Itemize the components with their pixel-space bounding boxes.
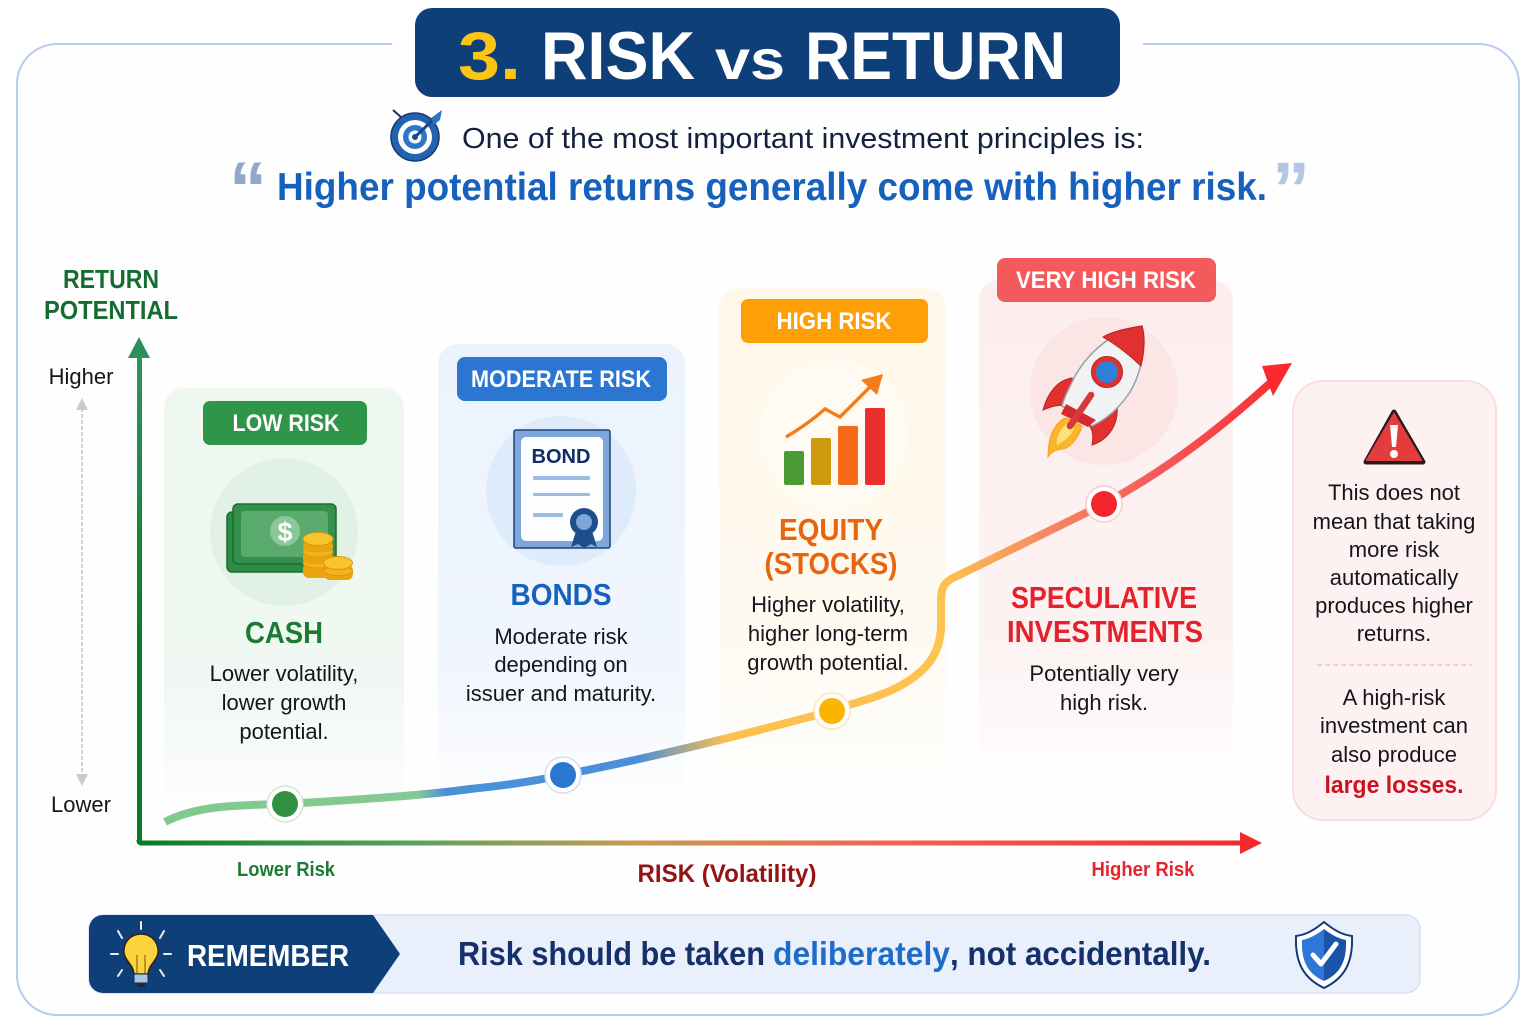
return potential axis title: POTENTIAL [44, 295, 178, 325]
dashed scale arrow [76, 398, 88, 786]
text: loss warning: large losses. [1324, 772, 1464, 799]
marker: bonds [545, 757, 581, 793]
text: equity description: Higher volatility, [751, 592, 905, 617]
title banner: RETURN [805, 18, 1066, 94]
panel: bonds [438, 344, 685, 809]
text: equity description: higher long-term [748, 621, 908, 646]
text: speculative description: Potentially very [1029, 661, 1179, 686]
icon: light bulb [111, 922, 171, 987]
heading: bonds: BONDS [510, 577, 612, 612]
icon: target [391, 110, 442, 161]
heading: equity stocks: (STOCKS) [764, 546, 898, 581]
badge: low risk: LOW RISK [232, 410, 340, 437]
text: bonds description: depending on [494, 652, 628, 677]
badge: high risk: HIGH RISK [776, 308, 892, 335]
label: lower risk: Lower Risk [237, 859, 336, 881]
badge: high risk [741, 299, 928, 343]
text: warning explanation: returns. [1357, 621, 1431, 646]
right quote mark: ” [1272, 147, 1310, 232]
badge: moderate risk: MODERATE RISK [471, 366, 652, 393]
icon: cash and coins [210, 458, 358, 606]
text: cash description: lower growth [222, 690, 346, 715]
y axis arrow [128, 337, 150, 843]
text: warning explanation: produces higher [1315, 593, 1473, 618]
heading: speculative investments: SPECULATIVE [1011, 580, 1197, 615]
label: higher: Higher [49, 364, 113, 389]
icon: warning triangle [1366, 412, 1423, 462]
icon: shield check [1296, 922, 1352, 988]
panel: speculative investments [979, 258, 1233, 790]
heading: equity stocks: EQUITY [779, 512, 883, 547]
icon: rocket [1030, 317, 1178, 465]
text: remember message: Risk should be taken [458, 935, 765, 972]
x axis title: RISK (Volatility) [638, 860, 816, 888]
panel: warning note [1293, 381, 1496, 820]
badge: very high risk [997, 258, 1216, 302]
heading: cash: CASH [245, 615, 323, 650]
left quote mark: “ [229, 147, 267, 232]
text: cash description: potential. [239, 719, 329, 744]
title banner: vs [715, 28, 785, 91]
text: warning explanation: automatically [1330, 565, 1458, 590]
icon: bond certificate [486, 416, 636, 566]
key principle quote: Higher potential returns generally come with higher risk. [277, 166, 1267, 209]
text: loss warning: A high-risk [1343, 685, 1446, 710]
intro sentence: One of the most important investment principles is: [462, 123, 1144, 155]
text: loss warning: also produce [1331, 742, 1457, 767]
text: bonds description: issuer and maturity. [466, 681, 656, 706]
text: cash description: Lower volatility, [210, 661, 358, 686]
text: equity description: growth potential. [747, 650, 909, 675]
icon: cash and coins: $ [277, 517, 293, 547]
text: bonds description: Moderate risk [494, 624, 629, 649]
label: lower: Lower [51, 792, 111, 817]
icon: bond certificate: BOND [532, 446, 590, 468]
remember banner [89, 915, 1420, 993]
badge: low risk [203, 401, 367, 445]
panel: equity [719, 288, 946, 798]
text: speculative description: high risk. [1060, 690, 1148, 715]
label: higher risk: Higher Risk [1092, 859, 1195, 881]
return potential axis title: RETURN [63, 264, 159, 294]
panel: cash [164, 388, 404, 818]
marker: speculative [1086, 486, 1122, 522]
marker: equity [814, 693, 850, 729]
text: warning explanation: mean that taking [1313, 509, 1475, 534]
risk return curve [165, 363, 1292, 822]
x axis arrow [139, 832, 1262, 854]
text: remember message: , not accidentally. [950, 935, 1211, 972]
title banner: RISK [541, 18, 695, 94]
label: remember: REMEMBER [187, 938, 349, 973]
title banner [415, 8, 1120, 97]
title banner: 3. [458, 18, 521, 94]
text: loss warning: investment can [1320, 713, 1468, 738]
icon: rising bar chart [760, 359, 908, 507]
text: remember message: deliberately [773, 935, 951, 972]
badge: moderate risk [457, 357, 667, 401]
text: warning explanation: more risk [1349, 537, 1440, 562]
heading: speculative investments: INVESTMENTS [1007, 614, 1203, 649]
marker: cash [267, 786, 303, 822]
badge: very high risk: VERY HIGH RISK [1016, 267, 1197, 294]
text: warning explanation: This does not [1328, 480, 1460, 505]
